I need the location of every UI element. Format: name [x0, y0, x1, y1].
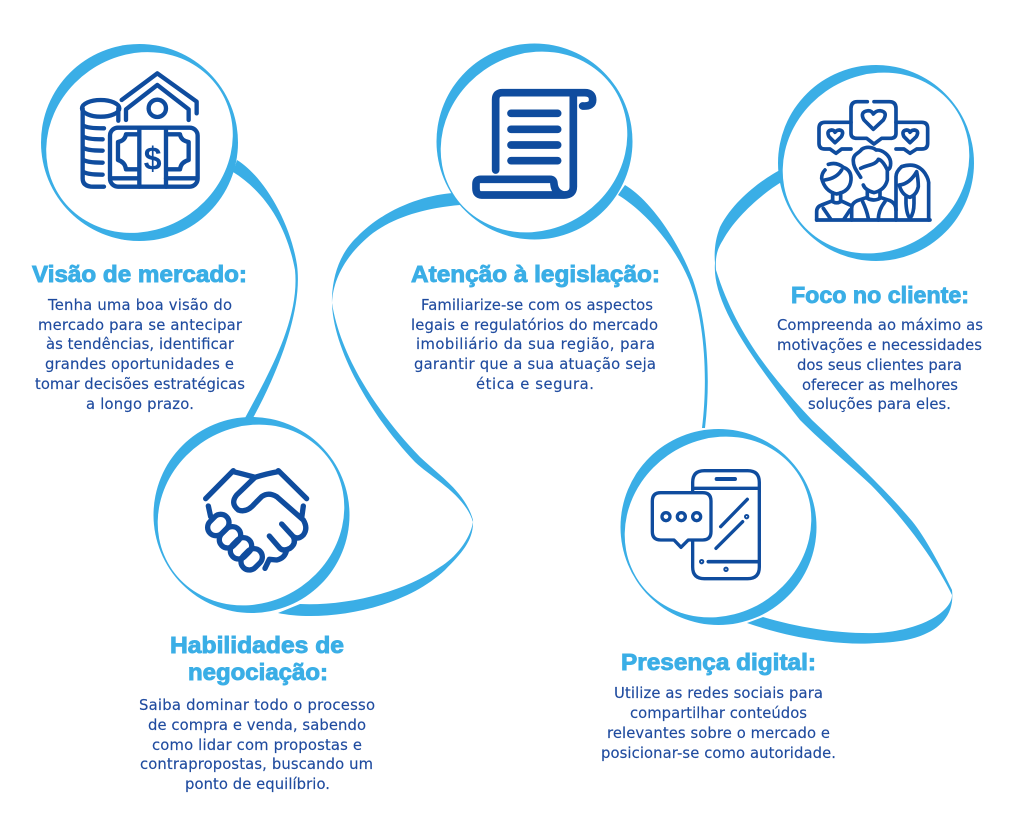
icon: coins, house and banknotes — [82, 73, 198, 187]
text block — [35, 297, 245, 413]
panel: digital presence — [589, 400, 847, 762]
heading: Atenção à legislação: — [411, 261, 660, 287]
text block: motivações e necessidades — [777, 337, 982, 354]
panel: market vision — [11, 16, 268, 413]
text block: posicionar-se como autoridade. — [601, 745, 836, 762]
text block — [411, 297, 658, 393]
icon: phone with chat bubble — [652, 471, 759, 579]
icon: coins, house and banknotes: $ — [144, 140, 162, 176]
text block: Saiba dominar todo o processo — [139, 697, 375, 714]
heading: Foco no cliente: — [791, 282, 969, 308]
circle ring — [747, 36, 1005, 290]
heading — [170, 632, 344, 685]
text block: soluções para eles. — [808, 396, 951, 413]
text block: de compra e venda, sabendo — [148, 717, 366, 734]
panel: customer focus — [747, 36, 1005, 413]
ribbon: legislation to negotiation — [278, 193, 473, 616]
text block — [601, 685, 836, 762]
ribbon: market vision to negotiation — [233, 160, 298, 418]
text block: relevantes sobre o mercado e — [607, 725, 830, 742]
text block — [777, 317, 983, 413]
text block: ponto de equilíbrio. — [185, 776, 330, 793]
panel: legislation — [405, 15, 663, 393]
text block: legais e regulatórios do mercado — [411, 317, 658, 334]
icon: scroll document — [476, 93, 593, 195]
text block: ética e segura. — [476, 376, 594, 393]
text block: às tendências, identificar — [46, 336, 235, 353]
text block: Tenha uma boa visão do — [47, 297, 232, 314]
text block: garantir que a sua atuação seja — [414, 356, 656, 373]
text block: oferecer as melhores — [802, 377, 958, 394]
ribbon connectors — [233, 160, 952, 644]
text block: Familiarize-se com os aspectos — [421, 297, 653, 314]
text block: tomar decisões estratégicas — [35, 376, 245, 393]
text block: Compreenda ao máximo as — [777, 317, 983, 334]
circle ring — [122, 388, 380, 642]
icon: handshake — [204, 471, 307, 573]
text block: como lidar com propostas e — [152, 737, 362, 754]
ribbon: legislation to digital presence — [618, 185, 708, 428]
heading: negociação: — [188, 659, 328, 685]
heading: Visão de mercado: — [32, 261, 247, 287]
text block: a longo prazo. — [86, 396, 194, 413]
heading: Presença digital: — [621, 649, 816, 675]
circle ring — [405, 15, 663, 269]
text block — [139, 697, 375, 793]
panel: negotiation — [122, 388, 380, 793]
text block: dos seus clientes para — [797, 357, 962, 374]
icon: people with hearts — [817, 102, 930, 220]
text block: grandes oportunidades e — [45, 356, 234, 373]
circle ring — [11, 16, 268, 269]
text block: Utilize as redes sociais para — [614, 685, 823, 702]
ribbon: customer focus to digital presence — [715, 170, 952, 644]
text block: contrapropostas, buscando um — [140, 756, 373, 773]
circle ring — [589, 400, 847, 654]
text block: imobiliário da sua região, para — [416, 336, 655, 353]
text block: mercado para se antecipar — [38, 317, 243, 334]
heading: Habilidades de — [170, 632, 344, 658]
text block: compartilhar conteúdos — [630, 705, 807, 722]
